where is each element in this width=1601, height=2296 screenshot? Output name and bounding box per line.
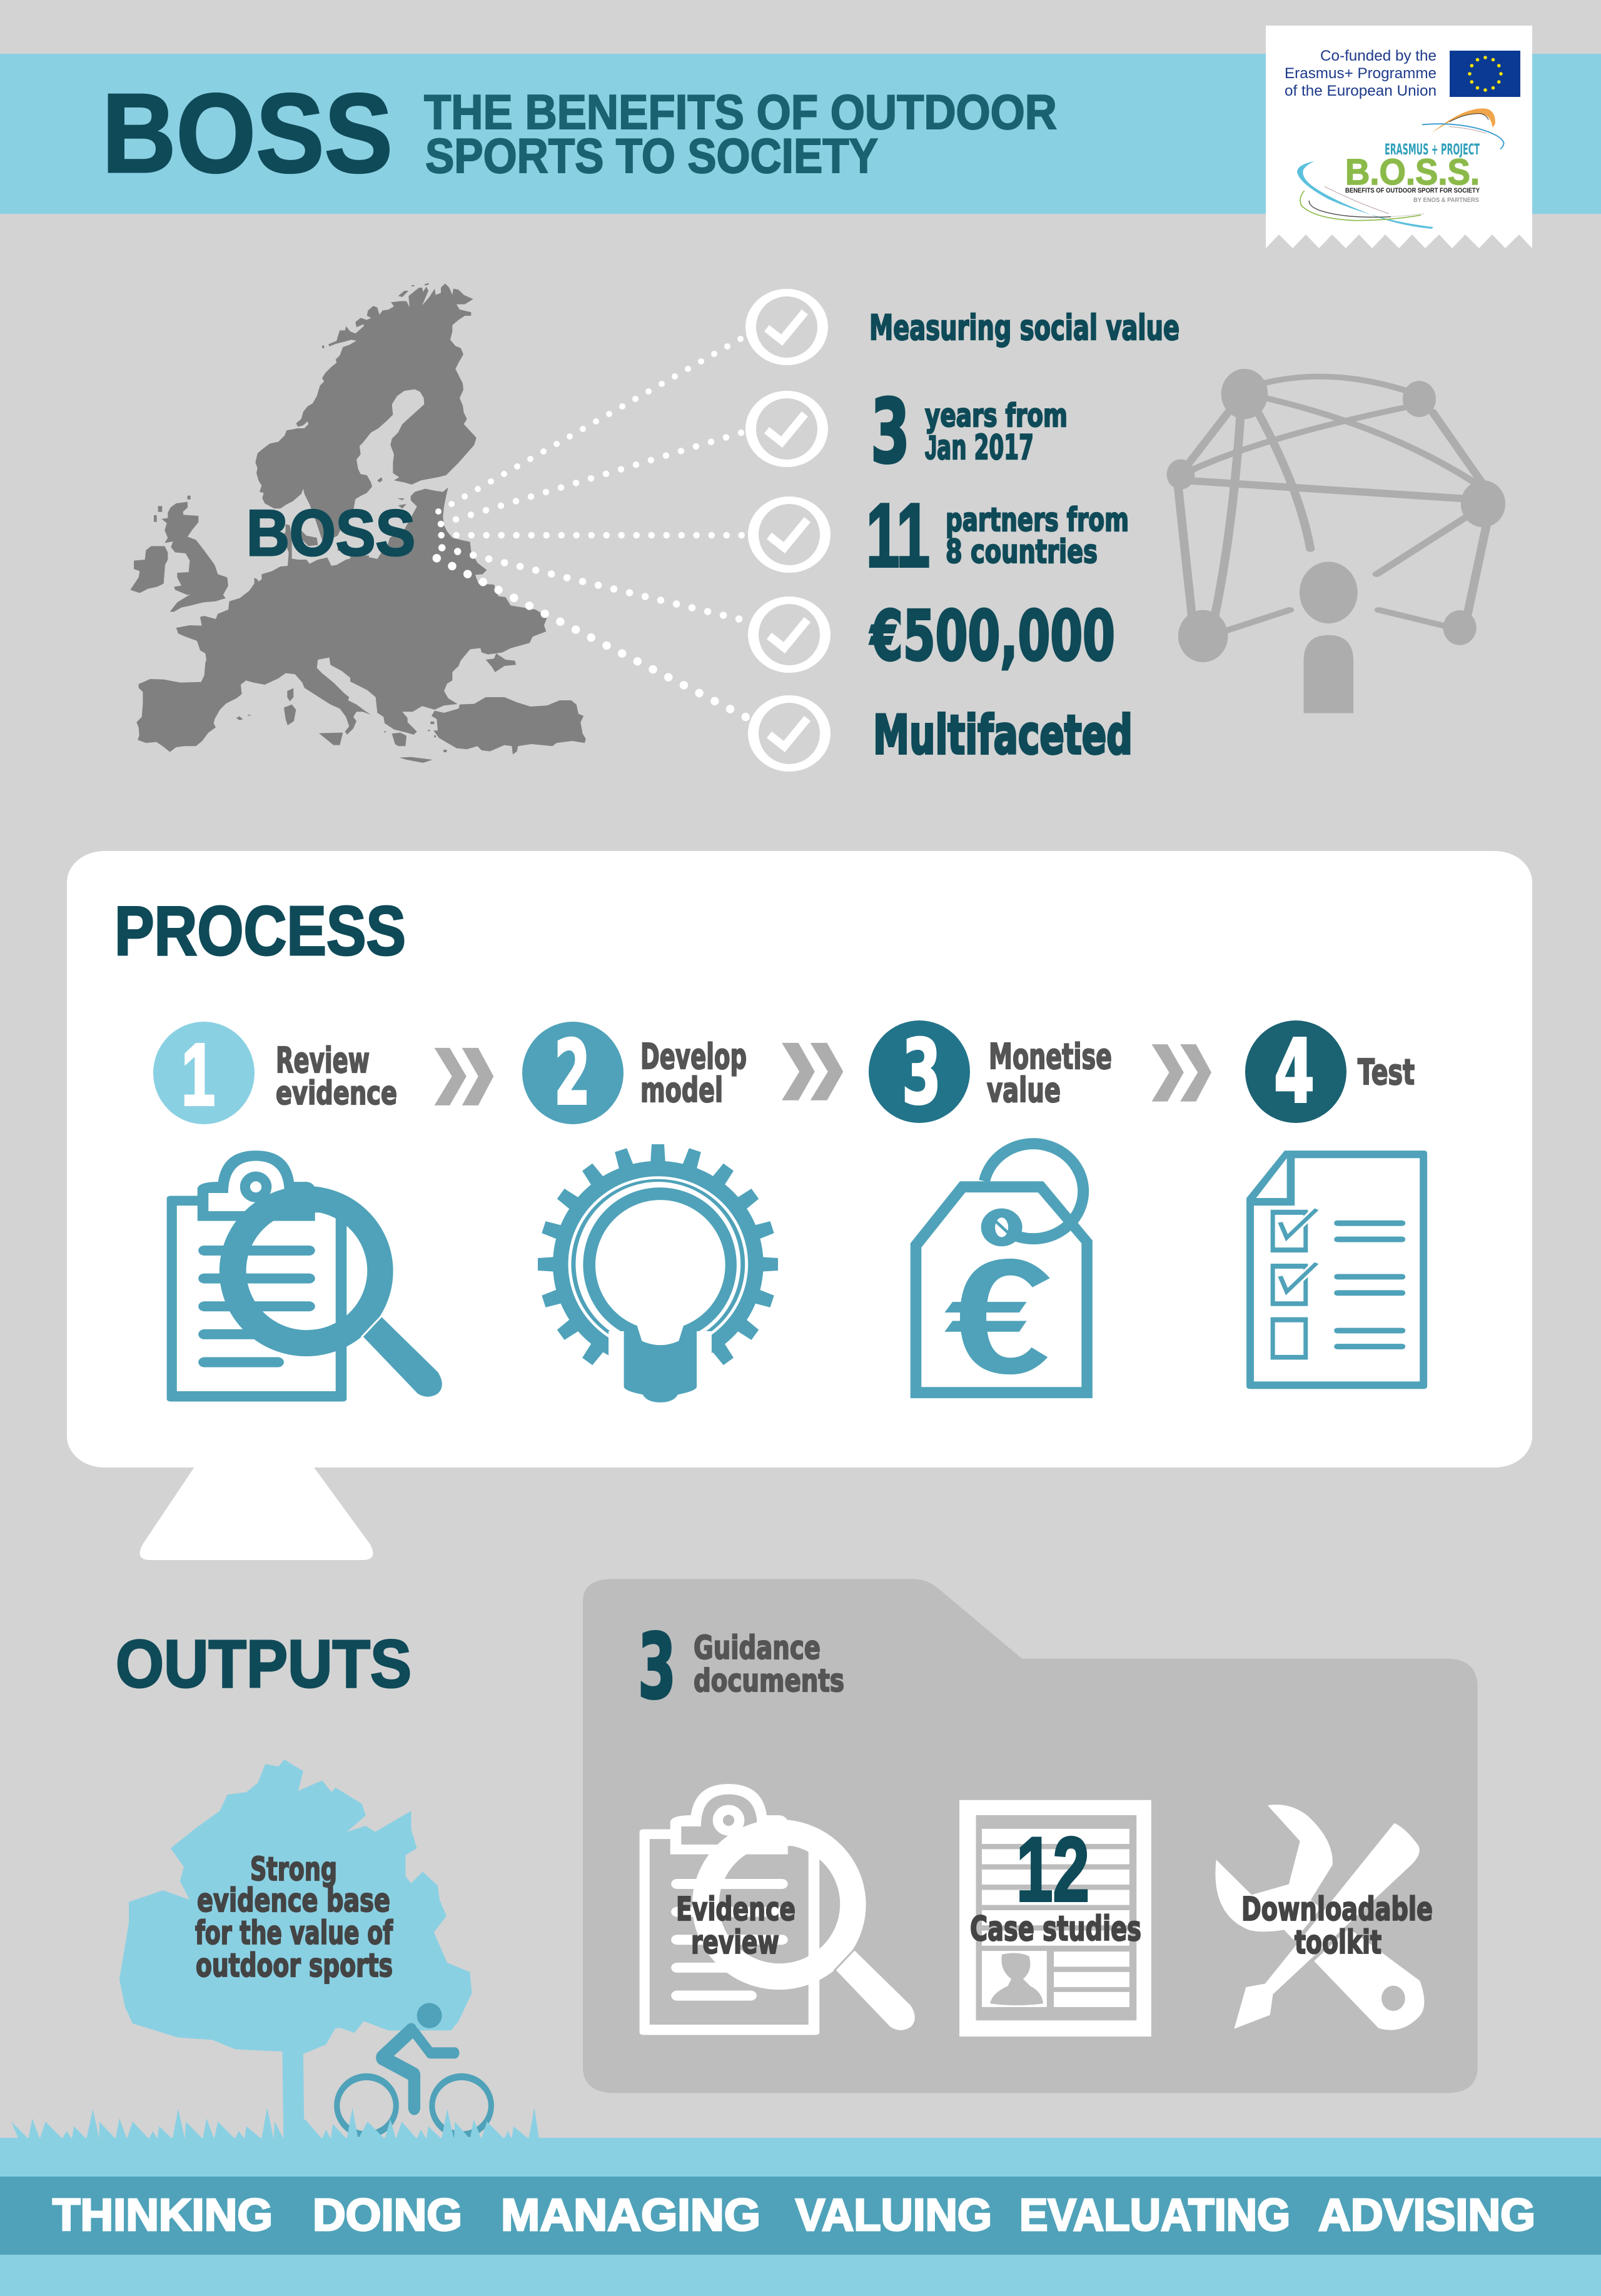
- text: strong evidence base: evidence base: [197, 1882, 390, 1920]
- heading: outputs: OUTPUTS: [116, 1626, 412, 1701]
- footer keywords: DOING: [313, 2190, 462, 2240]
- step 2 badge: 2: [554, 1022, 590, 1125]
- EU funding text: Co-funded by the: [1320, 48, 1437, 64]
- monitor screen: [67, 851, 1532, 1468]
- label: evidence review: Evidence: [676, 1891, 795, 1928]
- step 3 label: value: [987, 1070, 1061, 1110]
- step 2 label: Develop: [640, 1037, 747, 1077]
- step 1 label: [276, 1040, 397, 1112]
- icon: cyclist: [337, 2003, 491, 2135]
- arrow: step 1 to 2: [435, 1048, 493, 1105]
- footer keywords: [53, 2190, 1535, 2240]
- fact: measuring social value: Measuring social value: [869, 308, 1179, 348]
- step 3 label: Monetise: [989, 1037, 1112, 1077]
- footer keywords: ADVISING: [1318, 2190, 1535, 2240]
- step 2 label: [640, 1037, 747, 1110]
- footer keywords: MANAGING: [501, 2190, 760, 2240]
- icon: price tag with euro: [911, 1144, 1093, 1398]
- fact: 11 partners: 11: [866, 485, 930, 586]
- icon: check 2: [745, 391, 828, 467]
- arrow: step 3 to 4: [1152, 1044, 1211, 1102]
- label: evidence review: review: [691, 1924, 779, 1961]
- step 3 badge: [869, 1020, 970, 1124]
- footer keywords: VALUING: [795, 2190, 992, 2240]
- step 2 badge: [522, 1022, 624, 1125]
- subtitle: SPORTS TO SOCIETY: [425, 128, 878, 183]
- subtitle: THE BENEFITS OF OUTDOOR: [424, 84, 1057, 139]
- text: strong evidence base: Strong: [250, 1851, 337, 1888]
- icon: check 3: [748, 496, 831, 573]
- text: strong evidence base: outdoor sports: [196, 1947, 393, 1985]
- step 1 label: Review: [276, 1040, 370, 1081]
- icon: case study sheet: [959, 1800, 1151, 2037]
- icon: EU flag: [1450, 51, 1520, 97]
- logo wordmark: B.O.S.S.: [1345, 152, 1480, 193]
- guidance label: [694, 1629, 844, 1699]
- logo wordmark: BENEFITS OF OUTDOOR SPORT FOR SOCIETY: [1345, 187, 1480, 194]
- grass: [11, 2108, 539, 2140]
- fact: 3 years: years from: [925, 398, 1068, 435]
- heading: process: PROCESS: [114, 892, 406, 970]
- label: evidence review: [676, 1891, 795, 1961]
- guidance label: Guidance: [694, 1629, 821, 1667]
- icon: check 4: [748, 597, 831, 673]
- fact: multifaceted: Multifaceted: [873, 704, 1133, 767]
- logo wordmark: [1345, 141, 1480, 204]
- step 2 label: model: [640, 1070, 723, 1110]
- icon: check 1: [745, 289, 828, 365]
- panel: process: [67, 851, 1532, 1560]
- dotted connector lines: [437, 339, 746, 717]
- fact: 3 years: [871, 381, 1068, 483]
- case study count: 12: [1016, 1818, 1089, 1920]
- label: downloadable toolkit: toolkit: [1295, 1924, 1381, 1961]
- step 1 label: evidence: [276, 1075, 397, 1112]
- logo card: [1266, 26, 1532, 248]
- text: strong evidence base: [195, 1851, 393, 1985]
- step 4 label: Test: [1358, 1052, 1415, 1093]
- arrow: step 2 to 3: [782, 1043, 843, 1100]
- step 3 label: [987, 1037, 1112, 1110]
- step 4 badge: [1245, 1020, 1346, 1123]
- icon: partner network: [1167, 369, 1505, 713]
- icon: check 5: [748, 695, 831, 772]
- EU funding text: of the European Union: [1285, 83, 1437, 99]
- fact: 3 years: Jan 2017: [925, 428, 1034, 467]
- label: downloadable toolkit: [1241, 1891, 1433, 1961]
- fact: budget: €500,000: [869, 596, 1115, 676]
- map label: BOSS: BOSS: [246, 497, 415, 570]
- step 3 badge: 3: [902, 1021, 941, 1124]
- fact: 11 partners: [866, 485, 1129, 586]
- icon: lightbulb gear: [538, 1144, 778, 1402]
- header band: [0, 54, 1601, 214]
- icon: wrench and screwdriver: [1215, 1805, 1424, 2032]
- step 4 badge: 4: [1274, 1021, 1315, 1123]
- icon: evidence clipboard white: [640, 1784, 916, 2035]
- icon: BOSS project swooshes: [1297, 108, 1504, 229]
- fact: 11 partners: 8 countries: [946, 533, 1098, 571]
- logo wordmark: ERASMUS + PROJECT: [1385, 141, 1480, 158]
- step 1 badge: [153, 1022, 255, 1124]
- icon: tree: [119, 1760, 472, 2140]
- title: BOSS: BOSS: [102, 71, 393, 196]
- map of Europe: [130, 283, 586, 763]
- footer keywords: THINKING: [53, 2190, 273, 2240]
- fact: 3 years: 3: [871, 381, 910, 483]
- label: case studies: Case studies: [970, 1909, 1141, 1948]
- logo wordmark: BY ENOS & PARTNERS: [1413, 197, 1479, 204]
- label: downloadable toolkit: Downloadable: [1241, 1891, 1433, 1928]
- guidance count: 3: [638, 1614, 676, 1719]
- panel: guidance folder: [583, 1579, 1478, 2093]
- subtitle: [424, 84, 1057, 183]
- text: strong evidence base: for the value of: [195, 1915, 393, 1952]
- footer keywords: EVALUATING: [1019, 2190, 1290, 2240]
- icon: clipboard with magnifier: [167, 1151, 443, 1401]
- folder shape: [583, 1579, 1478, 2093]
- fact: 11 partners: partners from: [946, 501, 1129, 539]
- guidance label: documents: [694, 1663, 844, 1699]
- step 1 badge: 1: [181, 1025, 215, 1124]
- icon: checklist document: [1246, 1151, 1427, 1389]
- monitor stand: [140, 1463, 373, 1560]
- EU funding text: Erasmus+ Programme: [1285, 65, 1437, 82]
- footer band: [0, 2138, 1601, 2296]
- EU funding text: [1285, 48, 1437, 99]
